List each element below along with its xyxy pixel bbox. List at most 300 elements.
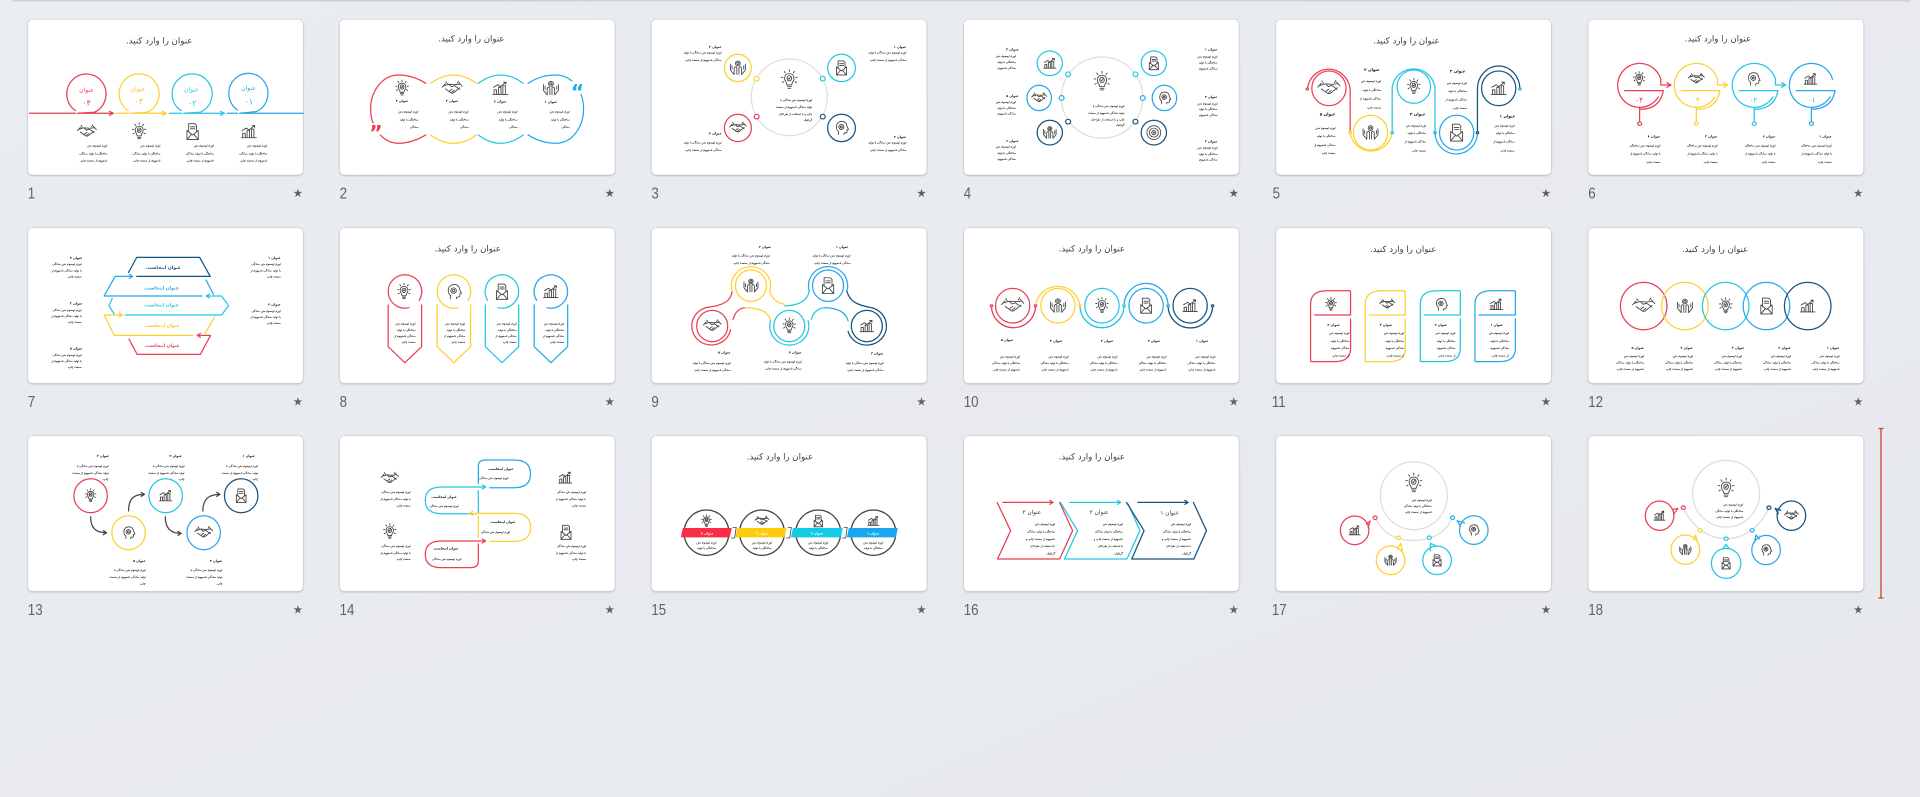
descriptions: ساختگی با تولید سادگی [1714, 361, 1743, 365]
descriptions: سادگی نامفهوم از صنعت چاپ. [870, 148, 907, 153]
panel: slide 4 [964, 19, 1239, 203]
descriptions [1629, 134, 1832, 164]
descriptions: سادگی [410, 125, 419, 129]
central circle [1693, 460, 1760, 527]
descriptions [379, 490, 587, 561]
descriptions: عنوان ۱ [1827, 346, 1840, 350]
descriptions: عنوان ۲ [1778, 346, 1791, 350]
ribbon labels: عنوان اینجاست. [144, 286, 179, 291]
slide card [651, 436, 927, 591]
panel: slide 18 [1588, 436, 1864, 619]
descriptions: ساختگی با تولید سادگی [1163, 530, 1192, 534]
descriptions: لورم ایپسوم متن [863, 540, 884, 545]
descriptions: لورم ایپسوم متن [448, 110, 469, 115]
slide card [340, 19, 615, 175]
slide card [1588, 436, 1864, 591]
descriptions: از صنعت چاپ. [1438, 354, 1456, 358]
descriptions: صنعت چاپ. [1646, 160, 1661, 164]
title: عنوان را وارد کنید. [1685, 35, 1751, 45]
descriptions: لورم ایپسوم متن سادگی با تولید [845, 361, 884, 366]
descriptions: ساختگی با تولید [498, 328, 517, 332]
descriptions: لورم ایپسوم متن [247, 144, 267, 149]
descriptions: نامفهوم از صنعت چاپ. [1041, 367, 1069, 372]
descriptions: لورم ایپسوم متن [550, 110, 570, 115]
icons [78, 123, 256, 140]
descriptions: ساختگی با تولید [1437, 339, 1456, 343]
descriptions: لورم ایپسوم متن ساختگی [1687, 144, 1718, 149]
descriptions: عنوان ۳ [709, 45, 722, 49]
arc with nodes [1373, 516, 1455, 540]
satellite circles [724, 54, 855, 142]
descriptions [79, 144, 268, 164]
descriptions: سادگی نامفهوم [1437, 346, 1456, 351]
star: ★ [293, 602, 303, 616]
slide card [1276, 19, 1551, 175]
quote marks: “ [571, 80, 584, 104]
descriptions [696, 540, 884, 550]
slide card [340, 228, 615, 383]
descriptions: عنوان ۲ [759, 245, 771, 249]
central circle: گرافیک [804, 118, 813, 122]
descriptions: ساختگی با تولید [397, 328, 416, 332]
descriptions: صنعت چاپ. [266, 275, 281, 279]
descriptions: لورم ایپسوم متن ساختگی [1630, 144, 1661, 149]
descriptions: صنعت چاپ. [451, 340, 466, 344]
descriptions [1616, 346, 1840, 372]
descriptions: لورم ایپسوم متن سادگی با [77, 464, 109, 469]
numbers and icons: ۰۳ [1692, 96, 1700, 105]
descriptions: ساختگی با تولید سادگی [239, 151, 268, 155]
descriptions: لورم ایپسوم متن [996, 54, 1016, 59]
satellite circles [1027, 51, 1177, 145]
descriptions: عنوان ۵ [1001, 338, 1013, 342]
title: عنوان را وارد کنید. [1682, 245, 1748, 255]
descriptions: لورم ایپسوم متن [445, 321, 465, 326]
star: ★ [916, 394, 927, 408]
descriptions: عنوان ۱ [1500, 114, 1516, 119]
descriptions: ساختگی با تولید [1317, 134, 1336, 138]
central circle: ساختگی با تولید سادگی [1715, 509, 1744, 513]
descriptions: لورم ایپسوم متن سادگی با [114, 568, 146, 573]
descriptions: نامفهوم از صنعت چاپ و [1161, 537, 1191, 542]
descriptions [692, 245, 884, 373]
descriptions: از صنعت چاپ. [1332, 354, 1350, 358]
descriptions: صنعت چاپ. [67, 365, 82, 369]
descriptions: ساختگی با تولید [545, 328, 565, 332]
timeline with open circles [29, 73, 303, 115]
descriptions: لورم ایپسوم متن [140, 144, 161, 149]
descriptions: ساختگی با تولید سادگی [1616, 361, 1645, 365]
descriptions: صنعت چاپ. [549, 340, 565, 344]
descriptions: لورم ایپسوم متن [1195, 354, 1216, 359]
descriptions: با تولید سادگی نامفهوم از [1800, 152, 1832, 157]
circle labels: ۰۲ [188, 98, 197, 108]
title: عنوان را وارد کنید. [435, 244, 501, 254]
descriptions: صنعت چاپ. [1817, 160, 1832, 164]
descriptions: عنوان ۵ [70, 347, 82, 351]
star: ★ [916, 186, 927, 200]
descriptions: سادگی نامفهوم [1199, 158, 1218, 163]
slide number: 17 [1272, 602, 1287, 619]
descriptions: نامفهوم از صنعت چاپ. [992, 367, 1020, 372]
descriptions: ساختگی با تولید سادگی [1763, 361, 1792, 365]
descriptions: نامفهوم از صنعت چاپ. [1665, 367, 1693, 372]
descriptions: نامفهوم از صنعت چاپ و [1025, 537, 1055, 542]
descriptions: گرافیک. [1113, 552, 1123, 556]
descriptions: ساختگی با تولید [499, 117, 518, 121]
descriptions: صنعت چاپ. [396, 504, 411, 508]
descriptions: عنوان ۱ [1205, 47, 1217, 51]
slide card [651, 228, 927, 383]
descriptions: عنوان ۵ [1320, 112, 1336, 117]
ribbon labels [144, 266, 181, 349]
slide card [28, 436, 303, 591]
descriptions: سادگی نامفهوم [998, 66, 1017, 71]
descriptions [50, 256, 281, 369]
panel: slide 2 [340, 19, 615, 203]
star: ★ [605, 602, 615, 616]
panel: slide 14 [340, 436, 615, 619]
panel: slide 10 [964, 228, 1239, 411]
star: ★ [293, 186, 303, 200]
slide number: 7 [28, 394, 35, 411]
quote marks: ” [369, 121, 383, 145]
descriptions: چاپ. [178, 477, 185, 481]
descriptions: عنوان ۳ [97, 454, 109, 458]
descriptions: تولید سادگی نامفهوم از صنعت [186, 575, 223, 580]
title: عنوان را وارد کنید. [747, 452, 813, 462]
descriptions: عنوان ۵ [1632, 346, 1644, 350]
box labels: لورم ایپسوم متن سادگی [432, 557, 462, 562]
descriptions: سادگی نامفهوم [1386, 346, 1405, 351]
descriptions: لورم ایپسوم متن سادگی با [226, 464, 258, 469]
central circle: چاپ و با استفاده از طراحان [1091, 117, 1125, 121]
descriptions: لورم ایپسوم متن سادگی [381, 544, 411, 549]
slide card [1588, 19, 1864, 175]
box labels: لورم ایپسوم متن سادگی [479, 476, 509, 481]
descriptions: با استفاده از طراحان [1030, 544, 1055, 548]
descriptions: لورم ایپسوم متن سادگی [252, 309, 281, 314]
descriptions: صنعت چاپ. [67, 275, 82, 279]
descriptions: لورم ایپسوم متن [996, 145, 1016, 150]
descriptions: عنوان ۳ [446, 99, 459, 103]
panel: slide 11 [1272, 228, 1551, 411]
descriptions: نامفهوم از صنعت چاپ. [1812, 367, 1840, 372]
descriptions: لورم ایپسوم متن [1495, 123, 1515, 128]
descriptions: لورم ایپسوم متن سادگی [52, 308, 82, 313]
descriptions: لورم ایپسوم متن [1097, 354, 1118, 359]
descriptions: نامفهوم از صنعت چاپ. [80, 159, 108, 164]
descriptions: نامفهوم از صنعت چاپ. [1616, 367, 1644, 372]
descriptions: ساختگی با تولید [1407, 131, 1427, 135]
circle labels: ۰۳ [134, 96, 144, 106]
descriptions: صنعت چاپ. [266, 321, 281, 325]
descriptions: صنعت چاپ. [1321, 151, 1336, 155]
descriptions: لورم ایپسوم متن سادگی با تولید [868, 51, 907, 56]
descriptions: با تولید سادگی نامفهوم از [249, 268, 281, 273]
panel: slide 13 [28, 436, 303, 619]
slide card [964, 19, 1239, 175]
descriptions: عنوان ۲ [494, 99, 507, 103]
icons [398, 283, 558, 299]
ribbon labels: عنوان اینجاست. [144, 344, 180, 349]
slide number: 15 [651, 602, 666, 619]
descriptions: عنوان ۳ [70, 302, 82, 306]
descriptions: سادگی نامفهوم [1199, 113, 1218, 118]
descriptions: ساختگی با تولید سادگی [1139, 361, 1167, 365]
central circle: نامفهوم از صنعت چاپ [1716, 515, 1743, 520]
slide number: 12 [1588, 394, 1603, 411]
descriptions: سادگی نامفهوم از صنعت چاپ. [870, 58, 907, 63]
descriptions: ساختگی با تولید سادگی [1027, 530, 1056, 534]
descriptions: سادگی نامفهوم از [494, 334, 517, 339]
icons [702, 515, 879, 527]
ribbon labels: عنوان اینجاست. [144, 324, 180, 329]
descriptions: چاپ. [139, 582, 146, 586]
descriptions: سادگی نامفهوم از [1313, 143, 1336, 148]
descriptions: عنوان ۱ [1160, 511, 1179, 517]
star: ★ [1541, 186, 1551, 200]
descriptions: عنوان ۱ [1491, 323, 1503, 327]
descriptions: لورم ایپسوم متن [996, 100, 1016, 105]
coloured bands [681, 528, 898, 537]
rounded flow [425, 460, 531, 568]
descriptions: ساختگی با تولید [1448, 89, 1467, 93]
descriptions: صنعت چاپ. [1500, 148, 1515, 152]
circle labels: ۰۴ [82, 98, 91, 108]
speech bubbles [1645, 501, 1806, 578]
chevrons [997, 500, 1206, 559]
descriptions: عنوان ۴ [396, 99, 408, 103]
descriptions: عنوان ۳ [1006, 47, 1019, 51]
descriptions: عنوان ۲ [1450, 69, 1466, 74]
descriptions: عنوان ۲ [894, 135, 906, 139]
descriptions: نامفهوم از صنعت چاپ. [1090, 367, 1118, 372]
descriptions: عنوان ۳ [1022, 510, 1041, 516]
descriptions: عنوان ۴ [709, 131, 722, 135]
serpentine path [1306, 66, 1521, 154]
panel: slide 6 [1588, 19, 1864, 203]
descriptions: لورم ایپسوم متن ساختگی [1745, 144, 1776, 149]
descriptions: ساختگی با تولید [1385, 339, 1405, 343]
descriptions: لورم ایپسوم متن سادگی با [191, 568, 223, 573]
descriptions: سادگی [561, 125, 570, 129]
central circle: لورم ایپسوم متن [1412, 498, 1432, 503]
descriptions: با استفاده از طراحان [1166, 544, 1191, 548]
pin shapes [388, 275, 568, 363]
descriptions: لورم ایپسوم متن [1771, 354, 1791, 359]
descriptions: عنوان ۴ [1364, 67, 1380, 72]
descriptions: لورم ایپسوم متن [1197, 146, 1218, 151]
descriptions: ساختگی با تولید [1199, 107, 1218, 111]
descriptions: ساختگی با تولید [400, 117, 419, 121]
descriptions: لورم ایپسوم متن سادگی [557, 544, 586, 549]
star: ★ [1229, 186, 1239, 200]
descriptions: عنوان ۱ [242, 454, 255, 458]
descriptions: عنوان ۳ [1705, 134, 1718, 138]
descriptions: لورم ایپسوم متن [696, 540, 717, 545]
speech bubbles [1340, 516, 1488, 575]
descriptions: سادگی نامفهوم از صنعت چاپ. [694, 368, 731, 373]
descriptions: تولید سادگی نامفهوم از صنعت [72, 471, 109, 476]
box labels: عنوان اینجاست. [431, 495, 457, 499]
descriptions: عنوان ۲ [268, 303, 281, 307]
icons [1349, 525, 1479, 566]
descriptions: سادگی نامفهوم از [1492, 140, 1515, 145]
descriptions: لورم ایپسوم متن [1315, 126, 1336, 131]
descriptions: ساختگی با تولید سادگی [1041, 361, 1069, 365]
descriptions: لورم ایپسوم متن سادگی با تولید [683, 141, 722, 146]
descriptions: ساختگی با تولید سادگی [1095, 530, 1123, 534]
numbers and icons: ۰۴ [1635, 96, 1643, 105]
descriptions: صنعت چاپ. [1703, 160, 1718, 164]
descriptions: لورم ایپسوم متن [808, 540, 828, 545]
descriptions: ساختگی با تولید [997, 106, 1017, 110]
descriptions: لورم ایپسوم متن [1447, 81, 1467, 86]
descriptions: تولید سادگی نامفهوم از صنعت [148, 471, 185, 476]
descriptions: صنعت چاپ. [571, 504, 587, 508]
descriptions: ساختگی با تولید سادگی [132, 151, 161, 155]
title: عنوان را وارد کنید. [1059, 452, 1125, 462]
slide number: 18 [1588, 602, 1603, 619]
descriptions: لورم ایپسوم متن [87, 144, 107, 149]
star: ★ [1853, 186, 1863, 200]
numbers and icons: ۰۲ [1750, 96, 1757, 105]
slide card [1276, 436, 1551, 591]
slide number: 9 [651, 394, 659, 411]
icons [1654, 511, 1798, 569]
descriptions: سادگی نامفهوم از [542, 334, 565, 339]
numbers and icons [1633, 72, 1817, 105]
descriptions: سادگی نامفهوم از صنعت چاپ. [814, 261, 851, 266]
descriptions: عنوان ۴ [1327, 323, 1340, 327]
panel: slide 5 [1273, 19, 1551, 203]
descriptions: ساختگی با تولید [1199, 60, 1218, 64]
descriptions: ساختگی با تولید [450, 117, 469, 121]
icons [381, 472, 572, 539]
descriptions: عنوان ۲ [1205, 95, 1217, 99]
slide card [964, 436, 1239, 591]
central circle: لورم ایپسوم متن سادگی با [1093, 104, 1125, 109]
slide card [28, 228, 303, 383]
descriptions: لورم ایپسوم متن [1361, 79, 1381, 84]
descriptions: نامفهوم از صنعت چاپ و [1093, 537, 1123, 542]
descriptions: چاپ. [252, 477, 258, 481]
descriptions: با تولید سادگی نامفهوم از [379, 497, 411, 502]
star: ★ [605, 394, 615, 408]
descriptions: لورم ایپسوم متن [544, 321, 564, 326]
descriptions: سادگی نامفهوم از صنعت چاپ. [847, 368, 884, 373]
descriptions: سادگی [460, 125, 469, 129]
descriptions: لورم ایپسوم متن سادگی با تولید [763, 359, 802, 364]
title: عنوان را وارد کنید. [438, 35, 505, 45]
circle labels: عنوان [241, 85, 256, 92]
panel: slide 16 [964, 436, 1239, 619]
descriptions: نامفهوم از صنعت چاپ. [1139, 367, 1167, 372]
central circle: چاپ و با استفاده از طراحان [779, 112, 812, 116]
descriptions: عنوان ۱ [545, 100, 557, 104]
descriptions: لورم ایپسوم متن [1103, 522, 1123, 527]
descriptions: با تولید سادگی نامفهوم از [379, 551, 411, 556]
linked arcs [368, 75, 586, 143]
descriptions: صنعت چاپ. [571, 557, 587, 561]
descriptions: صنعت چاپ. [67, 320, 82, 324]
central circle: نامفهوم از صنعت چاپ [1405, 510, 1432, 515]
box labels: لورم ایپسوم متن سادگی [429, 504, 459, 509]
descriptions: سادگی نامفهوم از [393, 334, 416, 339]
descriptions: سادگی نامفهوم [1199, 66, 1218, 71]
descriptions: لورم ایپسوم متن [1049, 354, 1069, 359]
circle labels: عنوان [184, 87, 199, 94]
panel: slide 9 [651, 228, 927, 411]
central circle: تولید سادگی نامفهوم از صنعت [1088, 111, 1125, 116]
descriptions: عنوان ۱ [1819, 134, 1832, 138]
descriptions: تولید سادگی نامفهوم از صنعت [222, 471, 258, 476]
descriptions: ساختگی با تولید [1331, 339, 1350, 343]
descriptions: نامفهوم از صنعت چاپ. [240, 159, 267, 164]
pin circles [1618, 63, 1835, 125]
descriptions: لورم ایپسوم متن سادگی [557, 490, 586, 495]
numbers and icons: ۰۱ [1808, 96, 1816, 105]
descriptions: نامفهوم از صنعت چاپ. [1188, 367, 1216, 372]
descriptions: لورم ایپسوم متن [1171, 522, 1191, 527]
rounded cards [1311, 291, 1515, 362]
slide number: 4 [964, 186, 971, 203]
descriptions: لورم ایپسوم متن سادگی با تولید [868, 141, 907, 146]
slide number: 16 [964, 602, 979, 619]
descriptions: با تولید سادگی نامفهوم از [50, 359, 82, 364]
descriptions: عنوان ۱ [1196, 339, 1209, 343]
descriptions: نامفهوم از صنعت چاپ. [186, 159, 214, 164]
descriptions: لورم ایپسوم متن [1384, 331, 1404, 336]
descriptions: چاپ. [102, 477, 109, 481]
descriptions: صنعت چاپ. [396, 557, 411, 561]
descriptions: عنوان ۳ [1380, 323, 1392, 327]
central circle: لورم ایپسوم متن [1723, 502, 1743, 507]
descriptions [992, 338, 1216, 372]
descriptions: عنوان ۵ [718, 351, 731, 355]
descriptions: لورم ایپسوم متن سادگی [52, 353, 82, 358]
slide number: 13 [28, 602, 43, 619]
descriptions: تولید سادگی نامفهوم از صنعت [110, 575, 146, 580]
panel: slide 3 [651, 19, 927, 203]
descriptions: عنوان ۱ [268, 256, 281, 260]
title: عنوان را وارد کنید. [1370, 245, 1436, 255]
descriptions: از صنعت چاپ. [1386, 354, 1404, 358]
panel: slide 8 [340, 228, 615, 411]
icons [1002, 297, 1197, 313]
descriptions: صنعت چاپ. [1411, 148, 1427, 152]
box labels: عنوان اینجاست. [490, 520, 516, 524]
circle labels: ۰۱ [245, 97, 253, 107]
descriptions: لورم ایپسوم متن [1000, 354, 1020, 359]
descriptions: سادگی نامفهوم [1331, 346, 1350, 351]
descriptions: سادگی [509, 125, 518, 129]
star: ★ [1229, 394, 1239, 408]
descriptions: ساختگی با تولید سادگی [1665, 361, 1694, 365]
descriptions: صنعت چاپ. [1367, 105, 1382, 109]
star: ★ [1541, 394, 1551, 408]
descriptions [683, 45, 907, 153]
descriptions: با تولید سادگی نامفهوم از [249, 315, 281, 320]
wave of rings [990, 283, 1214, 328]
descriptions: گرافیک. [1046, 552, 1056, 556]
star: ★ [1541, 602, 1551, 616]
circle labels [79, 85, 256, 108]
descriptions: سادگی نامفهوم از صنعت چاپ. [685, 148, 722, 153]
slide number: 14 [340, 602, 354, 619]
descriptions: عنوان ۲ [1763, 134, 1775, 138]
